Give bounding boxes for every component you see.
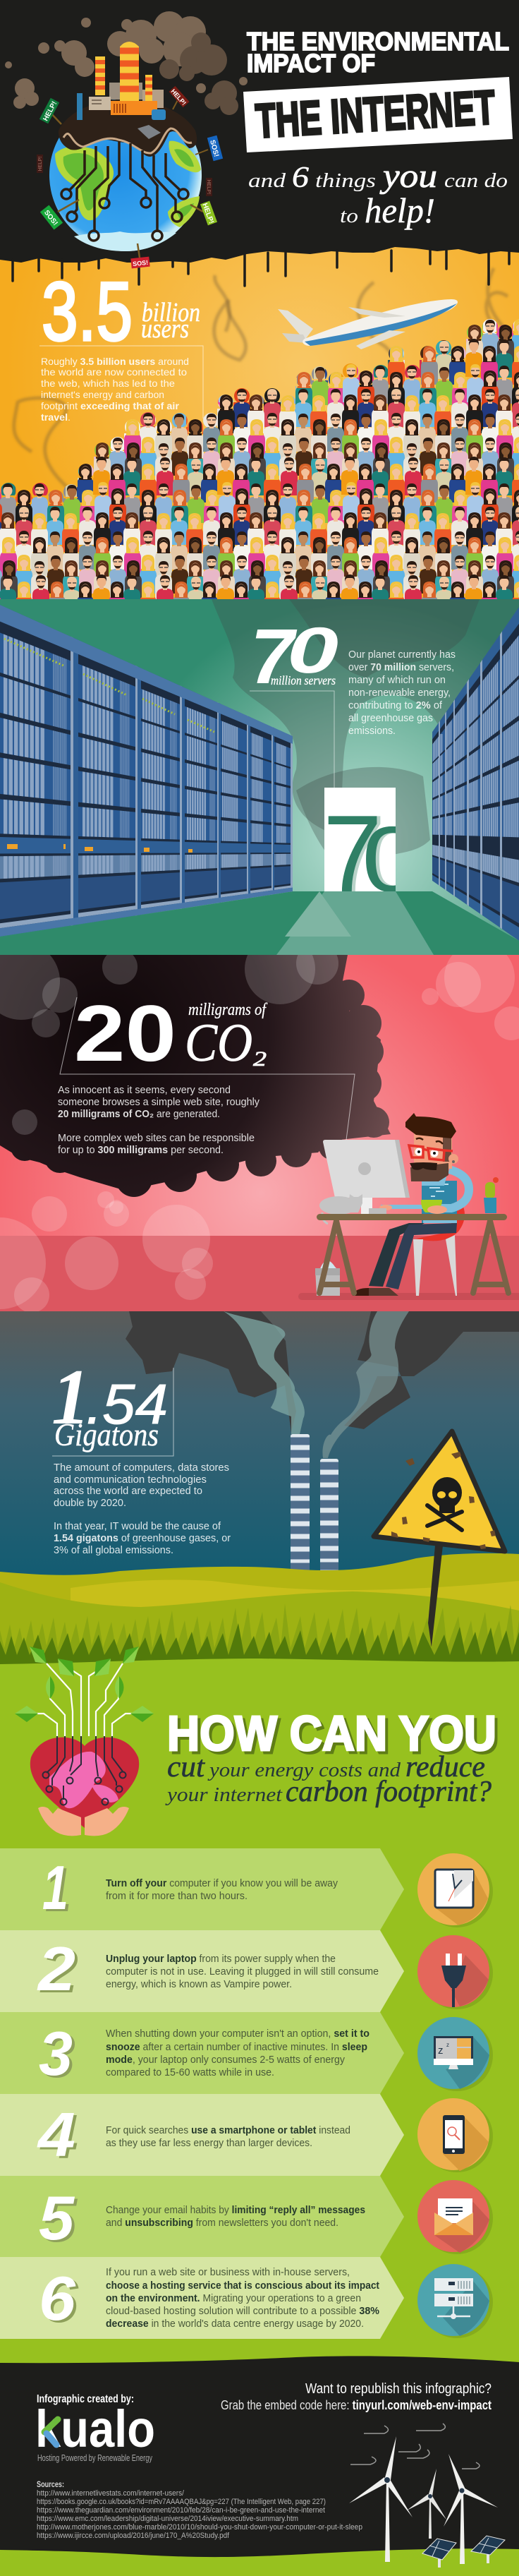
tip number 1: 1 <box>45 1855 71 1925</box>
tip panel 2 <box>0 1930 493 2012</box>
computer monitor <box>323 1140 410 1214</box>
sources list: Sources: <box>37 2481 64 2489</box>
section: 3.5 billion users <box>39 265 203 423</box>
icon: monitor: z <box>438 2045 443 2057</box>
icon: plug <box>417 1935 493 2009</box>
tip panel 4 <box>0 2094 493 2176</box>
kualo logo: kualo <box>35 2400 155 2458</box>
tip text 2: computer is not in use. Leaving it plugged in will still consume <box>106 1966 379 1978</box>
tip number 3: 3 <box>42 2021 75 2090</box>
co2 paragraph <box>58 1084 260 1156</box>
sign: sos green: SOS! <box>42 209 59 227</box>
sign: help faded right: HELP! <box>206 179 211 195</box>
users paragraph: internet's energy and carbon <box>41 389 164 400</box>
subheading line two: carbon footprint? <box>286 1776 491 1808</box>
text frame lines <box>39 346 203 419</box>
section: gigatons <box>0 1311 519 1666</box>
stat: 20 milligrams of CO2 <box>58 989 355 1156</box>
subheading line one: cut <box>167 1751 205 1783</box>
icon: clock <box>417 1853 493 1927</box>
floor <box>137 891 519 955</box>
turbine medium <box>444 2454 498 2564</box>
sources list: https://www.theguardian.com/environment/2010/feb/28/can-i-be-green-and-use-the-internet <box>37 2506 325 2515</box>
sign: sos blue <box>195 136 223 161</box>
hair <box>405 1113 456 1138</box>
icon: monitor <box>417 2017 493 2091</box>
sign: help faded left: HELP! <box>38 157 43 171</box>
tip text 3: When shutting down your computer isn't an option, set it to <box>106 2028 370 2040</box>
tip panel 6 <box>0 2257 493 2339</box>
big number 20: 20 <box>74 989 176 1078</box>
tip text 5 <box>106 2204 365 2229</box>
servers paragraph: all greenhouse gas <box>348 712 433 724</box>
servers paragraph: many of which run on <box>348 674 446 686</box>
pale smoke right <box>322 1311 409 1458</box>
co2 paragraph: for up to 300 milligrams per second. <box>58 1144 224 1156</box>
server stack <box>89 83 164 110</box>
tip text 2 <box>106 1953 379 1990</box>
frame lines <box>250 691 334 788</box>
floor shadow <box>298 1293 519 1300</box>
world map on heart <box>49 1752 118 1808</box>
big number 1.54: .54 <box>86 1373 168 1436</box>
republish callout <box>221 2381 491 2412</box>
label million servers: million servers <box>271 673 336 687</box>
subtitle: things <box>315 170 376 192</box>
illustration: man at desk <box>315 1113 508 1296</box>
sky background <box>0 1311 519 1579</box>
users paragraph <box>41 356 189 423</box>
section: how can you background <box>0 1659 519 2576</box>
servers paragraph: emissions. <box>348 725 396 737</box>
tip text 2: Unplug your laptop from its power supply when the <box>106 1953 336 1965</box>
tip text 6: on the environment. Migrating your operations to a green <box>106 2292 361 2304</box>
servers paragraph: contributing to 2% of <box>348 699 443 711</box>
sign: help faded left <box>37 155 43 173</box>
title line two: IMPACT OF <box>247 49 375 78</box>
desk <box>317 1214 508 1293</box>
gigatons paragraph: The amount of computers, data stores <box>54 1462 229 1474</box>
near leg <box>386 1223 457 1289</box>
section: co2 <box>0 934 519 1313</box>
sign: sos red: SOS! <box>133 259 149 267</box>
subheading line two <box>165 1776 491 1808</box>
icon: server <box>417 2264 493 2338</box>
big number 3.5: 3.5 <box>42 265 133 359</box>
warning sign <box>374 1431 505 1551</box>
dark smoke right <box>344 1311 519 1429</box>
credit label: Infographic created by: <box>37 2393 134 2405</box>
sign: help green: HELP! <box>42 100 59 123</box>
big number 1.54 <box>51 1354 168 1441</box>
label gigatons: Gigatons <box>54 1416 159 1452</box>
sign: sos blue: SOS! <box>208 139 220 158</box>
heading: how can you <box>165 1706 499 1808</box>
tip panel 5 <box>0 2176 493 2257</box>
embed link: Grab the embed code here: tinyurl.com/web-env-impact <box>221 2398 491 2412</box>
gigatons paragraph <box>54 1462 231 1556</box>
label billion users: users <box>141 314 189 344</box>
circuit traces <box>61 141 188 241</box>
icon: monitor: z <box>446 2042 449 2048</box>
crowd of people <box>0 319 519 599</box>
heart and circuit illustration <box>15 1647 154 1836</box>
big number 70 <box>255 627 338 683</box>
subheading line one: reduce <box>405 1751 485 1783</box>
tip number 5: 5 <box>39 2183 75 2253</box>
cpu chip <box>138 125 161 139</box>
big number 70: 7 <box>250 613 298 700</box>
label billion users: billion <box>142 298 200 327</box>
users paragraph: the web, which has led to the <box>41 378 175 389</box>
tip text 5: and unsubscribing from newsletters you don't need. <box>106 2217 338 2229</box>
chimneys <box>291 1434 338 1572</box>
tip text 3: mode, your laptop only consumes 2-5 watts of energy <box>106 2054 345 2066</box>
oil spill <box>59 99 197 157</box>
tip number 6: 6 <box>39 2263 76 2333</box>
waste bin <box>315 1260 340 1296</box>
factory chimneys <box>95 42 152 101</box>
sources list: https://www.ijircce.com/upload/2016/june/170_A%20Study.pdf <box>37 2532 230 2540</box>
heart <box>30 1738 139 1828</box>
tip text 3 <box>106 2028 370 2078</box>
turbine small <box>407 2469 446 2539</box>
gigatons paragraph: across the world are expected to <box>54 1485 202 1497</box>
main title <box>243 27 513 230</box>
solar panel one <box>422 2539 456 2568</box>
tip number 1: 1 <box>42 1853 68 1922</box>
heart circuit <box>42 1736 126 1805</box>
wind turbines and solar panels <box>349 2424 505 2568</box>
big number 1.54: 1 <box>51 1354 90 1441</box>
icon: airplane <box>278 299 458 349</box>
tip number 2: 2 <box>37 1934 75 2004</box>
users paragraph: the world are now connected to <box>41 366 187 378</box>
floor <box>0 1236 519 1311</box>
icon: email <box>417 2180 493 2254</box>
smoke wisps <box>14 268 508 487</box>
footer dark band <box>0 2356 519 2557</box>
gigatons paragraph: 1.54 gigatons of greenhouse gases, or <box>54 1532 231 1544</box>
header dark background with oil drips <box>0 0 519 286</box>
sources list: http://www.internetlivestats.com/internet-users/ <box>37 2489 185 2498</box>
tip text 1 <box>106 1877 338 1902</box>
tip text 1: Turn off your computer if you know you will be away <box>106 1877 338 1889</box>
tip text 4: as they use far less energy than larger devices. <box>106 2137 312 2149</box>
glowing doorway with 70 <box>324 788 396 891</box>
tip number 2: 2 <box>39 1936 78 2006</box>
tip text 6: choose a hosting service that is conscious about its impact <box>106 2280 379 2292</box>
black smoke cloud <box>0 955 391 1197</box>
grass <box>0 1603 519 1666</box>
frame lines <box>52 1368 173 1456</box>
tin can <box>152 109 166 120</box>
subheading line one: your energy costs and <box>207 1759 401 1781</box>
label milligrams of: milligrams of <box>188 1001 268 1019</box>
network cable <box>77 93 83 120</box>
servers paragraph: over 70 million servers, <box>348 661 454 673</box>
co2 paragraph: As innocent as it seems, every second <box>58 1084 231 1096</box>
tip text 2: energy, which is known as Vampire power. <box>106 1978 292 1990</box>
label CO2: CO <box>185 1013 252 1073</box>
sign: help light green <box>190 201 217 225</box>
servers paragraph <box>348 649 456 737</box>
shirt <box>381 1168 469 1223</box>
tip number 3: 3 <box>39 2018 73 2088</box>
stat: 70 million servers <box>250 613 456 788</box>
solar panel two <box>471 2536 505 2563</box>
co2 paragraph: someone browses a simple web site, roughly <box>58 1096 260 1108</box>
shoes <box>353 1288 398 1296</box>
subtitle <box>248 157 508 230</box>
pale smoke puffs <box>0 934 519 1313</box>
gigatons paragraph: double by 2020. <box>54 1497 126 1509</box>
sources list: https://www.emc.com/leadership/digital-universe/2014iview/executive-summary.htm <box>37 2515 298 2523</box>
tip number 4: 4 <box>39 2102 78 2172</box>
hands <box>379 1205 447 1214</box>
subtitle: and <box>248 170 286 192</box>
circuit branches with leaves <box>15 1647 154 1736</box>
co2 paragraph: More complex web sites can be responsible <box>58 1132 255 1144</box>
skull and crossbones <box>427 1477 462 1530</box>
republish heading: Want to republish this infographic? <box>305 2381 491 2397</box>
subheading line one <box>167 1751 485 1783</box>
users paragraph: footprint exceeding that of air <box>41 400 180 411</box>
tip text 4 <box>106 2124 350 2149</box>
dark smoke left <box>126 1311 296 1433</box>
sign: sos green <box>40 200 79 230</box>
heading shadow and text: HOW CAN YOU <box>167 1706 496 1761</box>
glowing doorway with 70: 7 <box>326 793 386 915</box>
coffee mug <box>421 1200 442 1212</box>
sources list: https://books.google.co.uk/books?id=mRv7AAAAQBAJ&pg=227 (The Intelligent Web, page 227) <box>37 2498 326 2506</box>
big number 70: 0 <box>287 615 338 687</box>
tip text 5: Change your email habits by limiting “reply all” messages <box>106 2204 365 2216</box>
title line one: THE ENVIRONMENTAL <box>247 27 509 56</box>
room background <box>0 599 519 955</box>
sources list: http://www.motherjones.com/blue-marble/2010/10/should-you-shut-down-your-computer-or-put-it-sleep <box>37 2523 362 2532</box>
tip text 6 <box>106 2266 379 2330</box>
subheading line two: your internet <box>165 1784 283 1806</box>
pale smoke left <box>224 1311 305 1434</box>
tagline: Hosting Powered by Renewable Energy <box>37 2453 153 2463</box>
globe illustration <box>37 42 223 268</box>
glowing doorway with 70: 7 <box>323 793 382 915</box>
gigatons paragraph: 3% of all global emissions. <box>54 1544 173 1556</box>
stat: 1.54 gigatons <box>51 1354 231 1556</box>
glowing doorway with 70: 0 <box>362 807 422 911</box>
gigatons paragraph: and communication technologies <box>54 1474 207 1486</box>
earth <box>49 99 202 251</box>
chair <box>413 1203 465 1296</box>
tip text 3: snooze after a certain number of inactive minutes. In sleep <box>106 2041 367 2053</box>
turbine large <box>349 2436 413 2562</box>
wind lines <box>350 2424 480 2469</box>
tip text 1: from it for more than two hours. <box>106 1890 248 1902</box>
section: servers <box>0 599 519 955</box>
subtitle: 6 <box>292 162 309 194</box>
sources list <box>37 2481 362 2540</box>
tip panel 1 <box>0 1848 493 1930</box>
warning sign post <box>426 1546 443 1647</box>
sign: sos red <box>130 243 150 268</box>
tip number 6: 6 <box>42 2265 79 2335</box>
tip number 4: 4 <box>37 2100 75 2169</box>
glowing doorway with 70: 0 <box>365 807 426 911</box>
smoke clouds over factory <box>5 11 248 115</box>
tip number 5: 5 <box>42 2185 78 2255</box>
subtitle: to <box>340 205 358 227</box>
subtitle: help! <box>365 191 435 230</box>
far leg <box>369 1223 425 1287</box>
gigatons paragraph: In that year, IT would be the cause of <box>54 1520 221 1532</box>
sign: help light green: HELP! <box>200 203 215 224</box>
hands <box>38 1807 129 1836</box>
tip text 6: decrease in the world's data centre energy usage by 2020. <box>106 2318 364 2330</box>
tip panel 3 <box>0 2012 493 2094</box>
right server racks <box>432 600 519 946</box>
potted cactus <box>484 1177 499 1213</box>
co2 paragraph: 20 milligrams of CO₂ are generated. <box>58 1108 220 1120</box>
factory base <box>111 101 157 115</box>
cat <box>319 1194 362 1224</box>
wall background <box>0 955 519 1236</box>
frame lines <box>60 997 355 1140</box>
sign: help green <box>39 98 61 124</box>
tip text 6: cloud-based hosting solution will contribute to a possible 38% <box>106 2305 379 2317</box>
servers paragraph: Our planet currently has <box>348 649 456 661</box>
users paragraph: travel. <box>41 411 71 423</box>
subtitle: can do <box>444 170 508 192</box>
continents <box>55 141 201 251</box>
users paragraph: Roughly 3.5 billion users around <box>41 356 189 367</box>
tip text 6: If you run a web site or business with in-house servers, <box>106 2266 350 2278</box>
servers paragraph: non-renewable energy, <box>348 687 451 699</box>
icon: smartphone <box>417 2098 493 2172</box>
label CO2 <box>188 1025 267 1066</box>
smoke in server room <box>212 599 519 875</box>
left server racks <box>0 600 293 946</box>
hills <box>0 1553 519 1666</box>
creator credit <box>35 2393 155 2463</box>
tip text 3: compared to 15-60 watts while in use. <box>106 2066 274 2078</box>
sign: help red: HELP! <box>170 88 188 107</box>
subtitle: you <box>379 157 437 195</box>
sign: help faded right <box>206 178 212 196</box>
section: yellow users background <box>0 240 519 607</box>
label CO2: 2 <box>253 1047 267 1071</box>
tip text 4: For quick searches use a smartphone or tablet instead <box>106 2124 350 2136</box>
face <box>409 1133 458 1181</box>
label billion users <box>141 298 200 344</box>
